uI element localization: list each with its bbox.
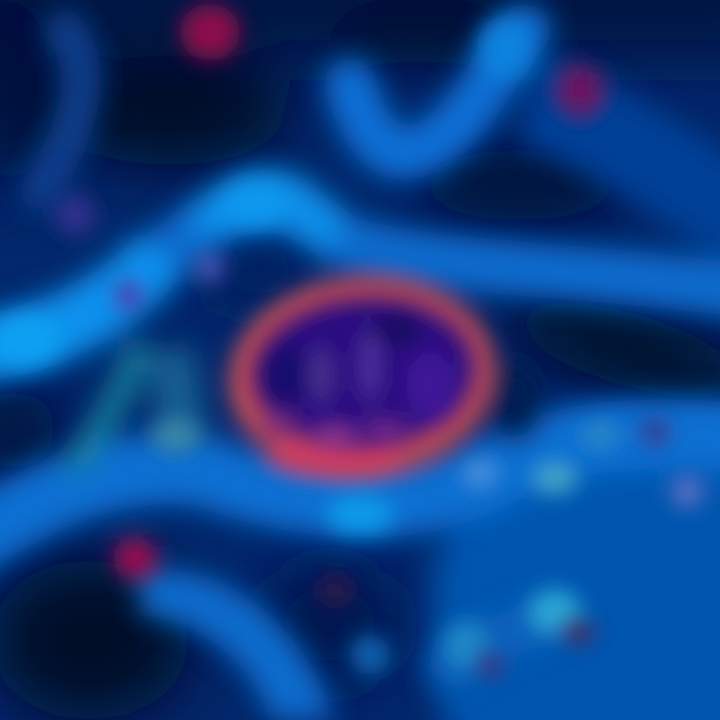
upper left strand bbox=[40, 30, 81, 190]
lower ring glow bbox=[267, 437, 403, 473]
nucleus: red ring with purple interior bbox=[220, 265, 504, 487]
upper band bbox=[0, 206, 720, 350]
outer ring bbox=[220, 265, 504, 487]
magenta spots bbox=[55, 4, 669, 677]
lower band bbox=[0, 434, 720, 560]
bottom left strand bbox=[140, 569, 335, 720]
interior lobes bbox=[262, 314, 454, 445]
dark hollow beside nucleus bbox=[491, 360, 539, 440]
interior bbox=[249, 291, 479, 453]
lower right field bbox=[432, 414, 720, 720]
V strand bbox=[350, 30, 525, 154]
